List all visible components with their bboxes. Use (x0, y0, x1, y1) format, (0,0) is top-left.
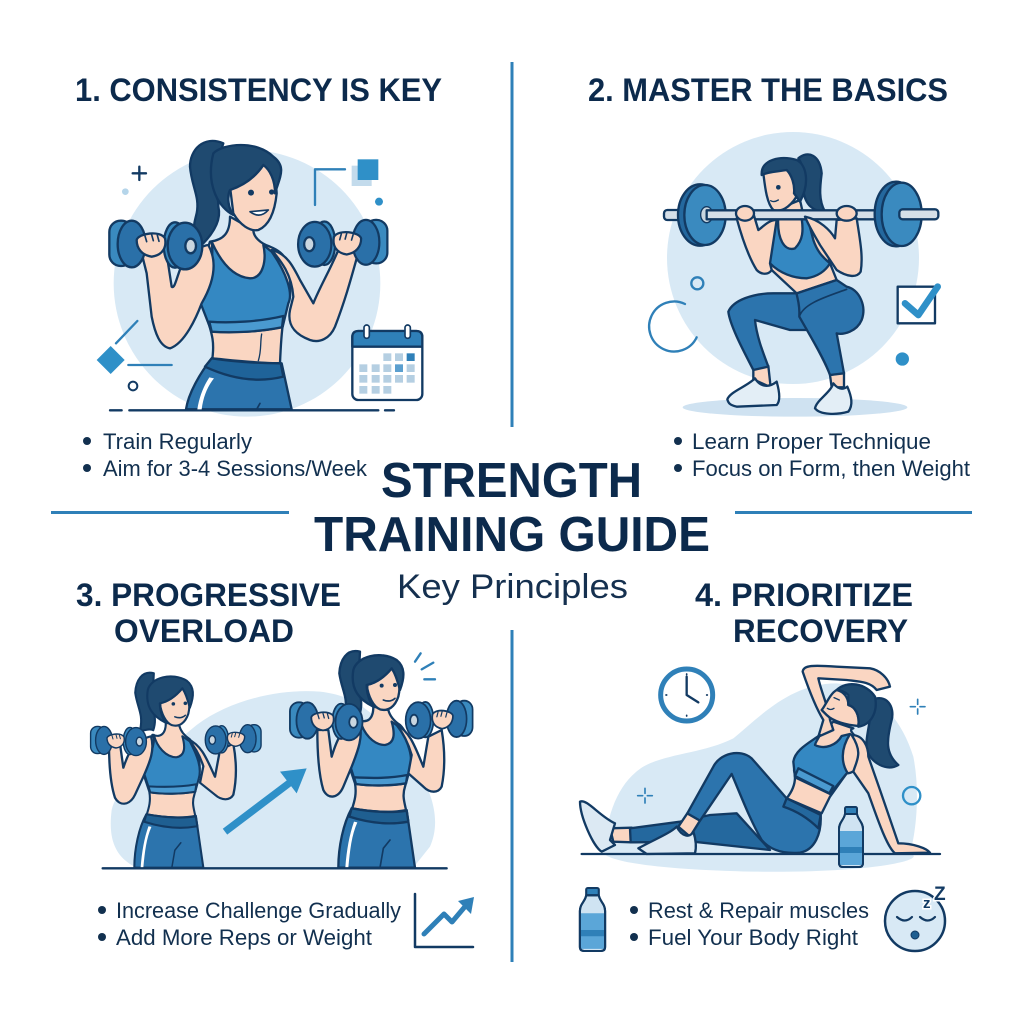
woman with large dumbbells (290, 651, 473, 868)
heading: overload (76, 577, 341, 649)
floor line (582, 850, 940, 857)
woman with small dumbbells (91, 673, 261, 868)
background blob (603, 683, 917, 872)
decorations (638, 699, 925, 804)
heading: overload: 3. PROGRESSIVE (76, 577, 341, 613)
decorations (649, 277, 938, 366)
bullets: consistency: Train Regularly (103, 429, 252, 454)
icon: large water bottle (580, 888, 605, 951)
background blob (111, 691, 435, 868)
reclining woman (580, 666, 930, 854)
illustration: recovery (580, 666, 940, 872)
bullets: overload: Add More Reps or Weight (116, 925, 372, 950)
bullets: recovery: Rest & Repair muscles (648, 898, 869, 923)
heading: recovery: 4. PRIORITIZE (695, 577, 913, 613)
icon: small water bottle (839, 807, 863, 867)
panel: progressive overload (76, 577, 474, 950)
panel: prioritize recovery (580, 577, 946, 951)
background circle (667, 132, 919, 384)
bullets: recovery: Fuel Your Body Right (648, 925, 858, 950)
bullets: consistency (83, 429, 368, 481)
panel: consistency is key (75, 72, 442, 481)
bullets: overload (98, 898, 401, 950)
heading: recovery: RECOVERY (733, 613, 908, 649)
bullets: basics: Focus on Form, then Weight (692, 456, 970, 481)
bullets: basics (674, 429, 970, 481)
title: TRAINING GUIDE (314, 508, 710, 562)
bullets: basics: Learn Proper Technique (692, 429, 931, 454)
title: STRENGTH (381, 454, 642, 508)
heading: overload: OVERLOAD (114, 613, 294, 649)
icon: clock (661, 669, 713, 721)
illustration: consistency (97, 141, 422, 417)
icon: rising chart (415, 894, 474, 947)
dividers (51, 62, 972, 962)
floor line (103, 865, 447, 872)
title (314, 454, 710, 606)
background circle (114, 150, 380, 417)
decorations (97, 159, 394, 410)
bullets: recovery (630, 898, 869, 950)
bullets: consistency: Aim for 3-4 Sessions/Week (103, 456, 368, 481)
woman squatting with barbell (664, 154, 938, 414)
illustration: overload (91, 651, 473, 868)
bullets: overload: Increase Challenge Gradually (116, 898, 401, 923)
panel: master the basics (588, 72, 970, 481)
icon: calendar (352, 325, 422, 400)
icon: sleeping face: z (923, 895, 930, 912)
title: Key Principles (397, 568, 628, 606)
heading: recovery (695, 577, 913, 649)
floor shadow (683, 398, 907, 417)
growth arrow (225, 768, 307, 832)
icon: sleeping face: Z (934, 884, 946, 905)
illustration: basics (649, 132, 938, 417)
heading: consistency: 1. CONSISTENCY IS KEY (75, 72, 442, 108)
heading: basics: 2. MASTER THE BASICS (588, 72, 948, 108)
woman with dumbbells (109, 141, 387, 409)
icon: sleeping face (885, 884, 946, 951)
